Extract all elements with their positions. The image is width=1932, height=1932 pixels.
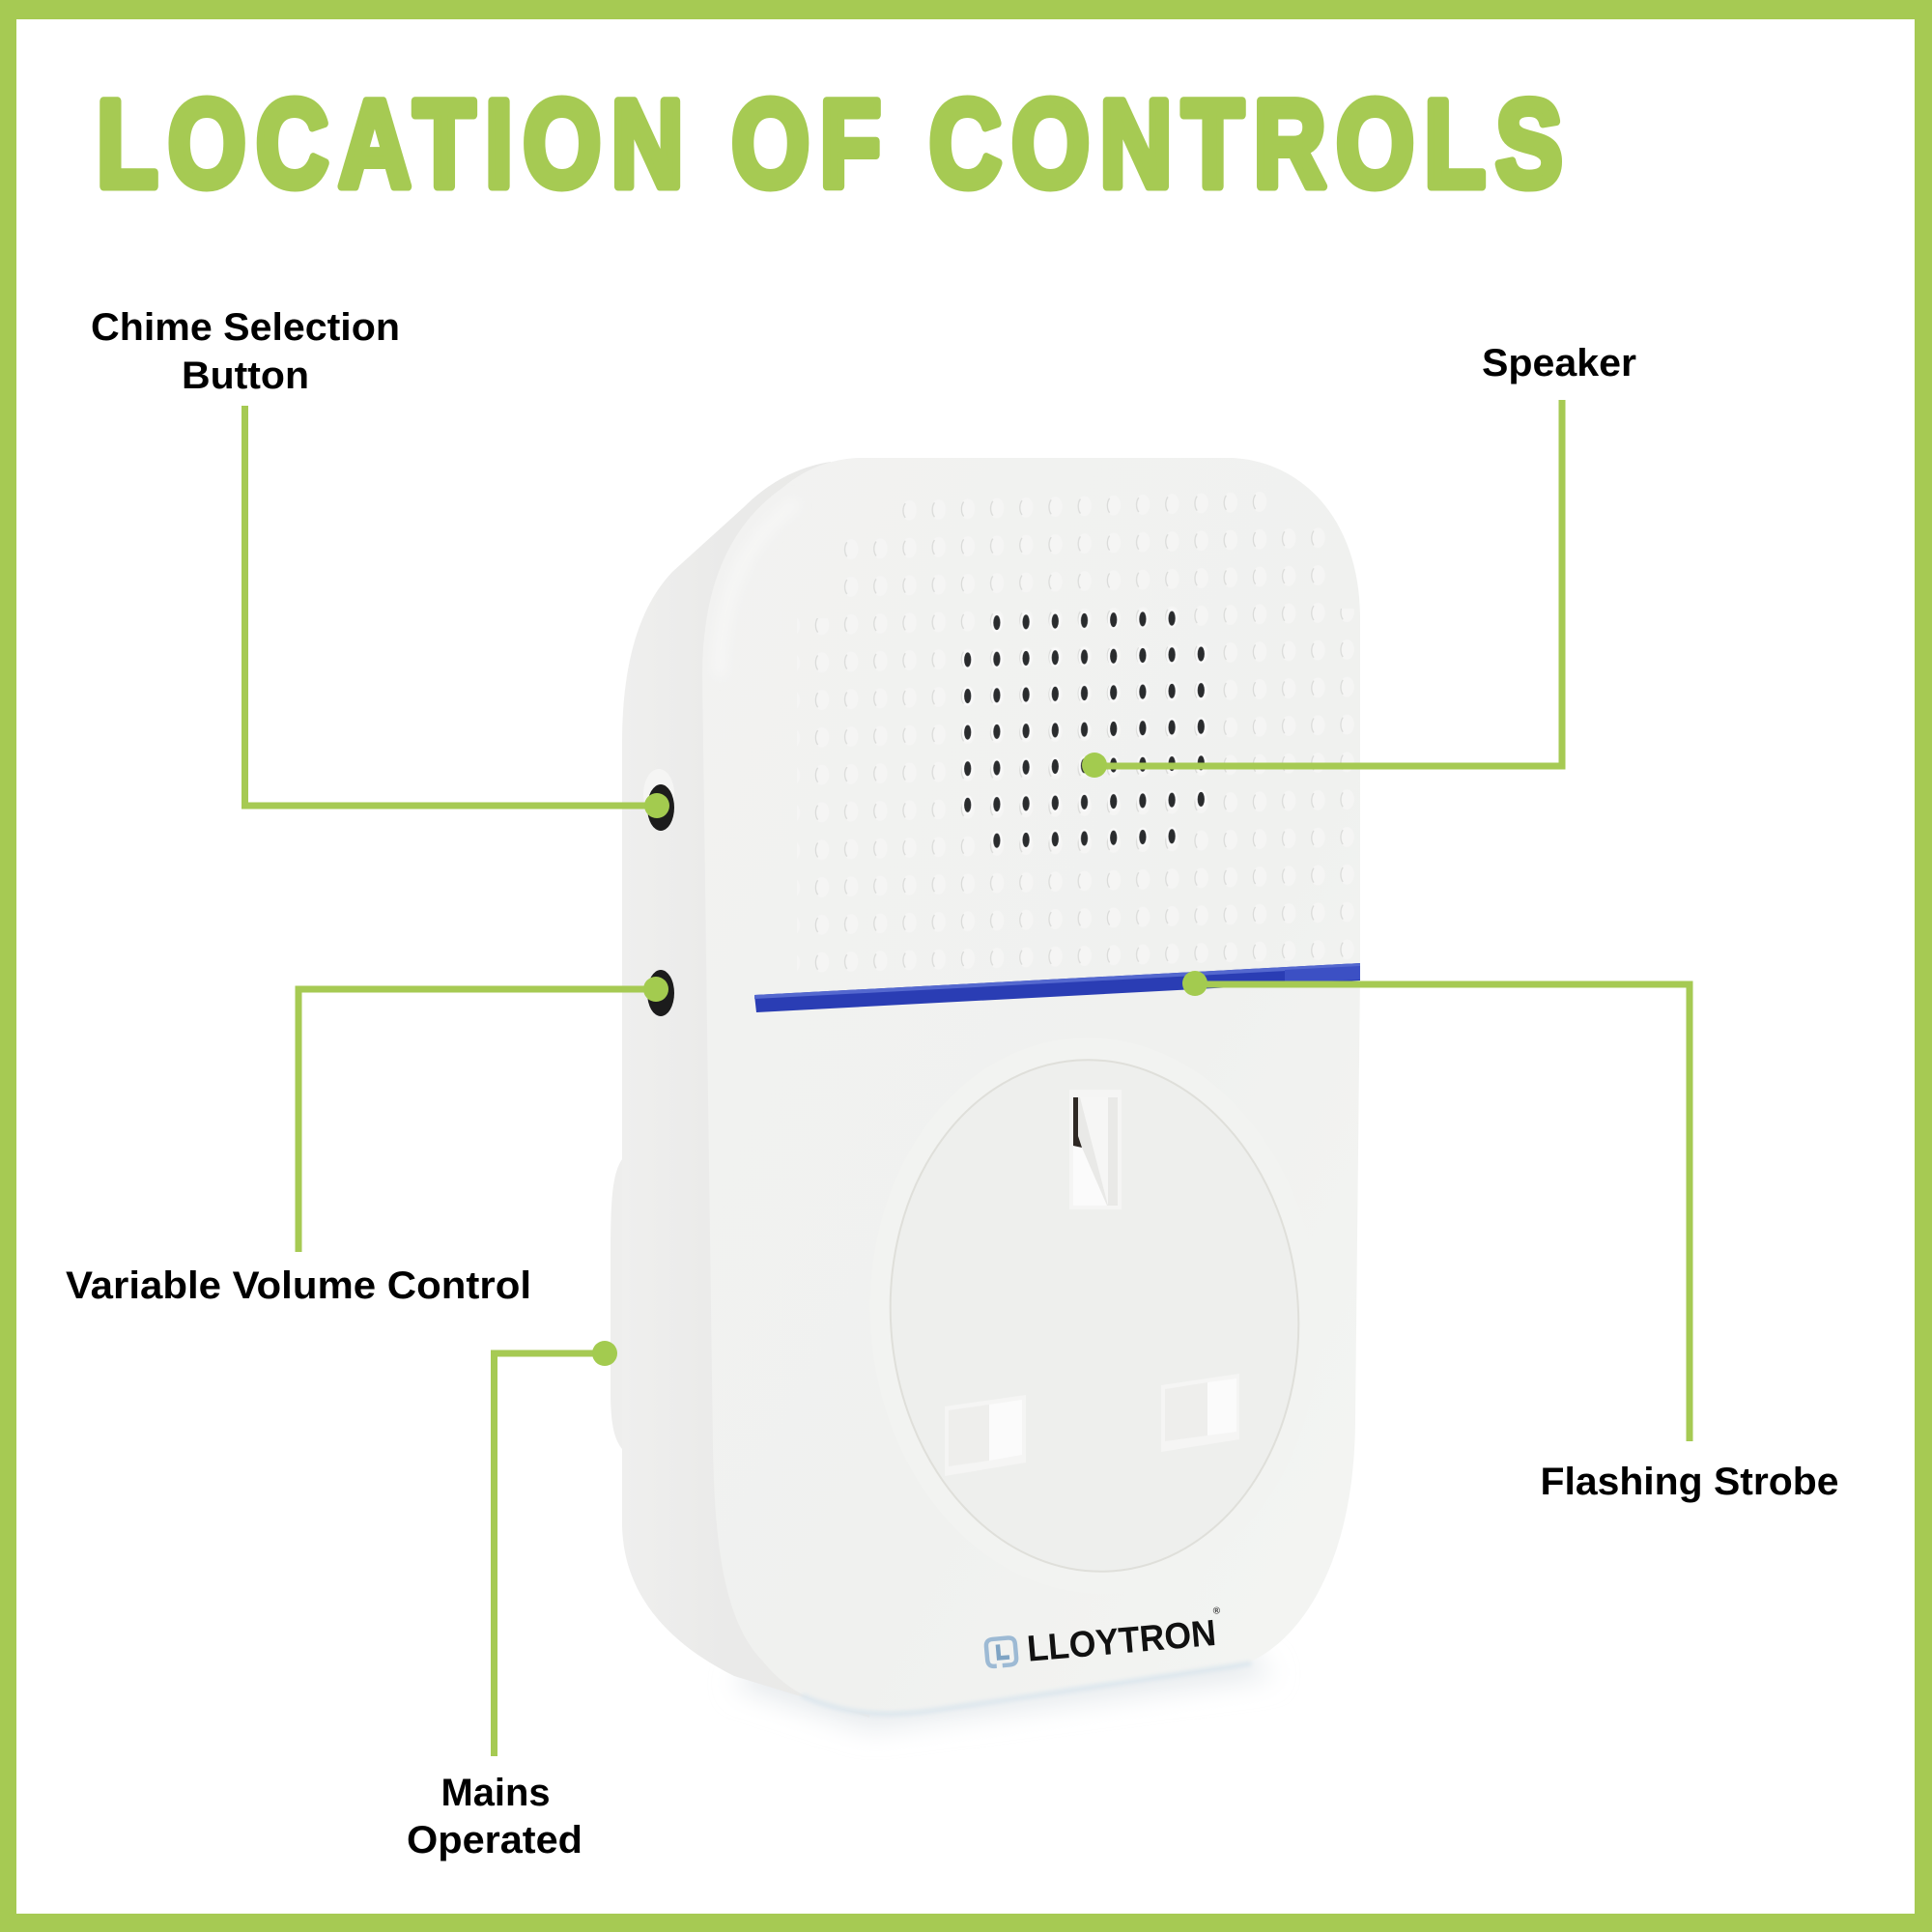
base light edge (802, 1663, 1251, 1714)
label: Flashing Strobe (1540, 1461, 1839, 1503)
product: Lloytron door chime (611, 458, 1362, 1729)
label: Speaker (1482, 342, 1636, 384)
logo wordmark: LLOYTRON (1026, 1613, 1218, 1670)
blue strobe bar (754, 963, 1360, 1012)
mains plug bump (611, 1159, 622, 1449)
label: Mains (440, 1772, 551, 1814)
speaker holes (962, 611, 1206, 848)
callout: variable volume control (66, 977, 668, 1307)
neutral pin slot (1161, 1374, 1239, 1452)
callout: speaker (1082, 342, 1636, 778)
speaker dimples (815, 495, 1343, 970)
chime selection button (643, 769, 674, 831)
callout: mains operated (407, 1341, 617, 1861)
side body (622, 462, 966, 1718)
live pin slot (945, 1395, 1026, 1476)
front face (702, 458, 1360, 1714)
label: Variable Volume Control (66, 1264, 531, 1307)
socket outer ring (851, 1023, 1338, 1608)
earth pin slot (1069, 1090, 1122, 1209)
front rim highlight (720, 502, 797, 676)
label: Chime Selection (91, 306, 400, 349)
socket plate (873, 1046, 1316, 1585)
ground shadow (734, 1642, 1275, 1729)
callout: chime selection button (91, 306, 669, 818)
label: Button (182, 355, 309, 397)
callout: flashing strobe (1182, 971, 1839, 1503)
title: LOCATION OF CONTROLS (97, 75, 1573, 213)
registered mark: ® (1212, 1605, 1221, 1617)
label: Operated (407, 1819, 582, 1861)
volume control (647, 970, 674, 1016)
logo mark (985, 1637, 1017, 1666)
brand logo (984, 1605, 1224, 1673)
